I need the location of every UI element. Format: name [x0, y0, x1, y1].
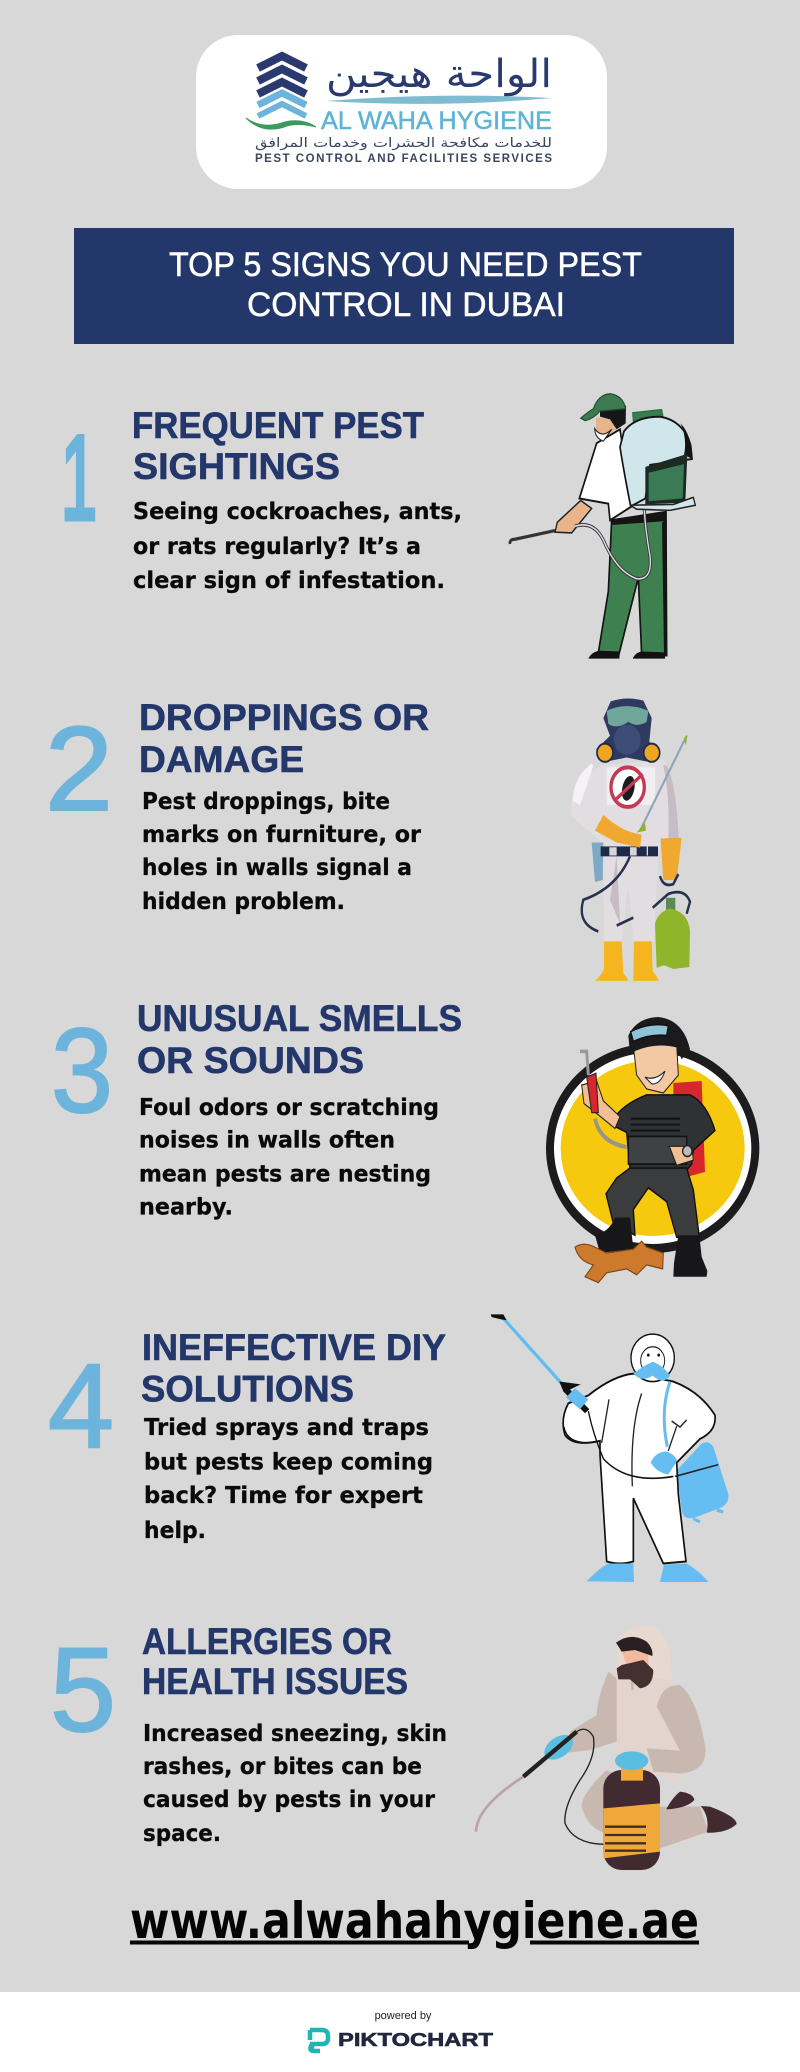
description 1: clear sign of infestation.: [133, 566, 445, 594]
description 4: [144, 1413, 433, 1544]
description 3: Foul odors or scratching: [139, 1093, 439, 1121]
panel: step 5: [50, 1621, 737, 1870]
icon: piktochart logo: [310, 2030, 328, 2051]
arabic name: الواحة هيجين: [326, 52, 552, 97]
heading 2: [139, 697, 429, 780]
illustration: technician in white coverall with blue sprayer: [491, 1314, 728, 1582]
description 3: noises in walls often: [139, 1126, 395, 1154]
heading 2: DROPPINGS OR: [139, 697, 429, 738]
description 5: [143, 1719, 447, 1847]
panel: logo: [196, 35, 607, 189]
wave: [326, 96, 552, 104]
number 5: 5: [50, 1623, 116, 1757]
illustration: technician with backpack sprayer: [510, 394, 695, 659]
heading 1: FREQUENT PEST: [132, 405, 424, 446]
illustration: mascot on yellow circle: [546, 1017, 759, 1283]
description 1: Seeing cockroaches, ants,: [133, 497, 462, 525]
heading 3: UNUSUAL SMELLS: [137, 998, 462, 1039]
description 1: or rats regularly? It’s a: [133, 532, 421, 560]
heading 5: [142, 1621, 408, 1702]
company name: AL WAHA HYGIENE: [321, 107, 552, 135]
description 1: [133, 497, 462, 594]
heading 5: ALLERGIES OR: [142, 1621, 392, 1662]
number 2: 2: [45, 702, 113, 836]
panel: step 1: [61, 394, 695, 659]
description 5: rashes, or bites can be: [143, 1752, 422, 1780]
piktochart wordmark: PIKTOCHART: [338, 2029, 494, 2050]
description 4: help.: [144, 1516, 206, 1544]
description 5: caused by pests in your: [143, 1785, 435, 1813]
heading 1: [132, 405, 424, 487]
description 4: but pests keep coming: [144, 1448, 433, 1476]
heading 3: [137, 998, 462, 1081]
heading 4: INEFFECTIVE DIY: [142, 1327, 446, 1368]
footer bar: [0, 1992, 800, 2072]
description 4: back? Time for expert: [144, 1481, 423, 1509]
panel: step 3: [51, 998, 759, 1283]
heading 5: HEALTH ISSUES: [142, 1661, 408, 1702]
description 2: hidden problem.: [142, 887, 345, 915]
heading 4: [141, 1327, 446, 1410]
description 3: mean pests are nesting: [139, 1160, 431, 1188]
heading 2: DAMAGE: [139, 739, 304, 780]
tagline: PEST CONTROL AND FACILITIES SERVICES: [255, 153, 552, 165]
description 2: [142, 787, 421, 915]
illustration: technician in white suit with gas mask: [570, 699, 690, 981]
title line 1: TOP 5 SIGNS YOU NEED PEST: [169, 246, 642, 284]
description 3: [139, 1093, 439, 1220]
icon: building: [246, 56, 316, 129]
description 5: Increased sneezing, skin: [143, 1719, 447, 1747]
description 3: nearby.: [139, 1192, 233, 1220]
title line 2: CONTROL IN DUBAI: [247, 286, 565, 324]
website link: www.alwahahygiene.ae: [130, 1892, 699, 1950]
panel: step 2: [45, 697, 690, 981]
number 4: 4: [48, 1339, 114, 1473]
heading 1: SIGHTINGS: [133, 446, 340, 487]
title banner: [74, 228, 734, 344]
description 2: holes in walls signal a: [142, 853, 412, 881]
powered by: powered by: [375, 2010, 432, 2022]
heading 3: OR SOUNDS: [137, 1040, 364, 1081]
description 4: Tried sprays and traps: [144, 1413, 429, 1441]
description 2: marks on furniture, or: [142, 820, 421, 848]
heading 4: SOLUTIONS: [141, 1368, 354, 1410]
description 5: space.: [143, 1819, 221, 1847]
panel: step 4: [48, 1314, 728, 1582]
number 1: 1: [61, 411, 97, 545]
number 3: 3: [51, 1004, 113, 1138]
arabic tagline: للخدمات مكافحة الحشرات وخدمات المرافق: [255, 136, 552, 151]
illustration: kneeling technician with orange tank: [476, 1626, 737, 1870]
description 2: Pest droppings, bite: [142, 787, 390, 815]
